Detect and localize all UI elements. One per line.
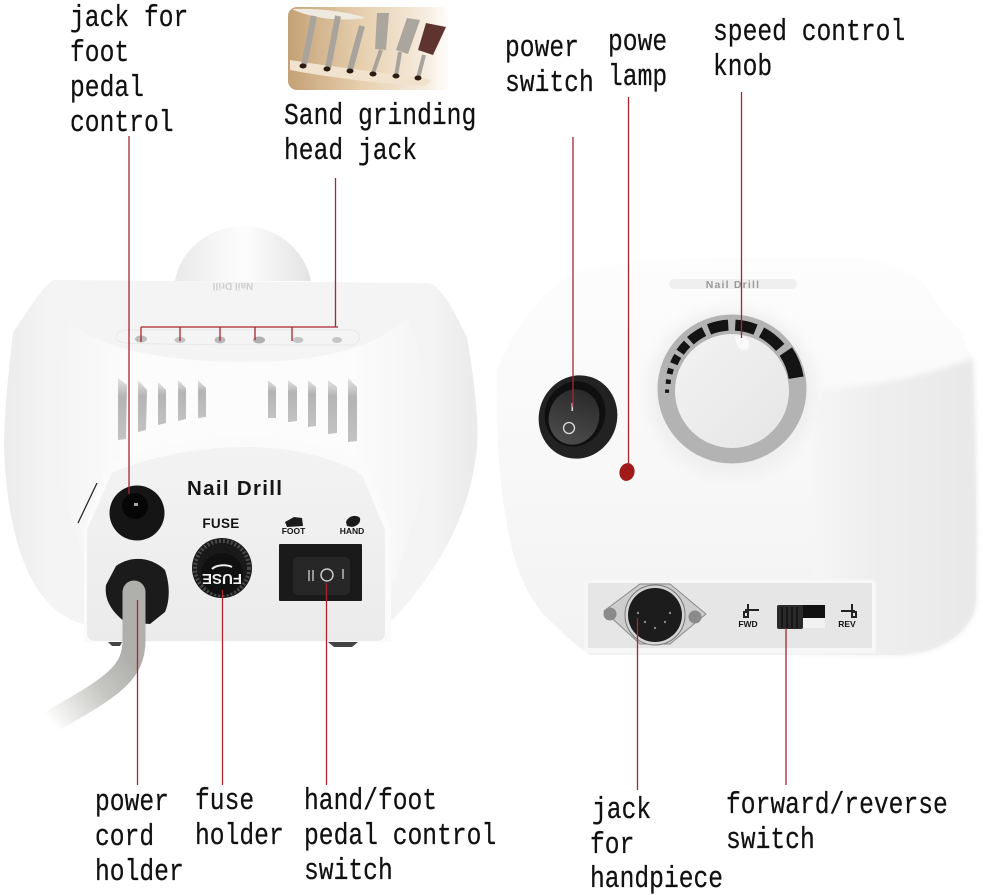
handpiece jack [604,584,706,645]
leader: fuse [222,590,224,785]
leader: handpiece jack [636,618,638,790]
faint embossed label: Nail Drill [706,279,760,291]
label: sand grinding head jack: head jack [284,135,417,169]
label: fuse holder: fuse [195,785,254,819]
speed control knob [648,309,816,477]
rocker switch [279,544,362,601]
leader: grinding head jacks [141,178,338,342]
power cord [50,592,134,722]
label: hand/foot pedal control switch: hand/foot [304,785,437,819]
black seam [78,483,97,523]
label: jack for foot pedal control: control [70,107,174,141]
label: power cord holder: power [95,786,169,820]
label: forward/reverse switch: switch [726,824,815,858]
label: power cord holder [95,786,184,890]
control panel [84,436,391,642]
leader: hand foot switch [326,583,328,785]
label: hand/foot pedal control switch [304,785,496,889]
REV label [838,604,856,629]
device: front view [497,258,976,655]
label: speed control knob: speed control [713,16,905,50]
label: power switch: switch [505,67,594,101]
label: speed control knob [713,16,905,85]
hand icon and label: HAND [340,526,364,536]
connector panel [584,580,876,653]
label: hand/foot pedal control switch: pedal control [304,820,496,854]
label: jack for handpiece [590,794,723,895]
faint mirrored label: Nail Drill [213,280,253,291]
label: jack for handpiece: for [590,829,634,863]
foot icon and label [282,517,306,536]
ventilation slots [118,378,357,442]
label: forward/reverse switch [726,789,948,858]
label: jack for foot pedal control: pedal [70,72,144,106]
label: fuse holder: holder [195,820,284,854]
label: sand grinding head jack: Sand grinding [284,100,476,134]
label: hand/foot pedal control switch: switch [304,855,393,889]
power lamp [617,461,637,483]
device: rear view [4,226,477,722]
fuse holder [192,538,252,598]
direction slider [777,605,825,629]
REV label: REV [838,619,856,629]
leader: power lamp [628,97,630,465]
leader: power cord [136,600,138,785]
label: jack for handpiece: jack [592,794,651,828]
foot icon and label: FOOT [282,526,306,536]
label: jack for foot pedal control: jack for [70,2,188,36]
label: jack for foot pedal control: foot [70,37,129,71]
leader: foot pedal jack [128,136,130,494]
label: power switch [505,32,594,101]
leader: power switch [572,137,574,407]
fuse holder: FUSE [202,570,242,587]
bit shanks [304,16,424,78]
label: forward/reverse switch: forward/reverse [726,789,948,823]
FWD label [738,604,759,629]
label: power cord holder: cord [95,821,154,855]
leader lines [129,92,786,790]
housing front facet [54,318,431,580]
dome [175,226,311,281]
hand icon and label [340,516,364,536]
label: power lamp [608,26,667,95]
label: fuse holder [195,785,284,854]
foot pedal jack [110,486,164,540]
label: sand grinding head jack [284,100,476,169]
label: jack for foot pedal control [70,2,188,141]
leader: speed knob [740,92,742,338]
lower facet shading [790,358,976,655]
panel heading: Nail Drill [187,477,282,500]
housing [4,280,477,640]
bit jack strip [116,330,360,345]
cord gland [106,559,169,624]
label: power cord holder: holder [95,856,184,890]
thumbnail: grinding bits [288,7,450,90]
fuse label: FUSE [202,516,240,531]
leader: direction switch [785,628,787,785]
label: power switch: power [505,32,579,66]
label: speed control knob: knob [713,51,772,85]
housing [497,258,976,655]
faint embossed label [669,279,797,291]
FWD label: FWD [738,619,758,629]
label: power lamp: powe [608,26,667,60]
feet [108,642,122,646]
power switch [527,364,629,470]
label: power lamp: lamp [608,61,667,95]
